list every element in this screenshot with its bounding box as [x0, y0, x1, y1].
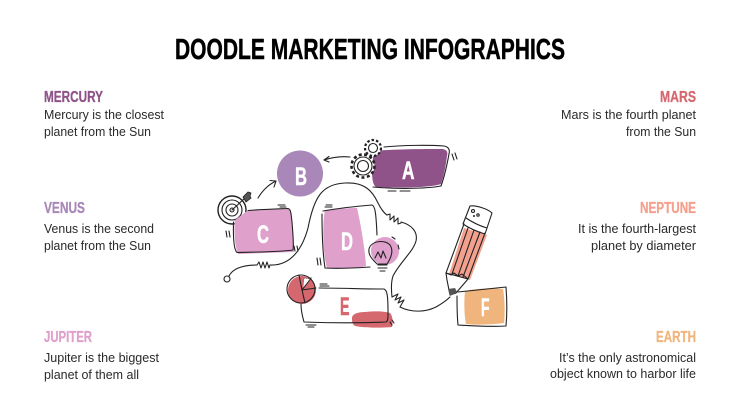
text block: Neptune: NEPTUNE — [640, 200, 696, 217]
text block: Earth: object known to harbor life — [550, 366, 696, 381]
text block: Jupiter: Jupiter is the biggest — [44, 350, 159, 365]
text block: Venus: VENUS — [44, 200, 85, 217]
text block: Mars: Mars is the fourth planet — [561, 107, 696, 122]
text block: Venus: Venus is the second — [44, 221, 154, 236]
icon: light bulb — [369, 237, 399, 271]
connector wire — [229, 183, 450, 311]
icon: gears — [352, 140, 381, 178]
text block: Mercury: Mercury is the closest — [44, 107, 164, 122]
text block: Jupiter: planet of them all — [44, 367, 139, 382]
icon: pie chart — [287, 275, 316, 304]
icon: target with dart — [218, 192, 251, 224]
text block: Neptune: planet by diameter — [591, 238, 697, 253]
text block: Jupiter — [44, 329, 159, 382]
panel F — [457, 287, 507, 326]
text block: Jupiter: JUPITER — [44, 329, 92, 346]
resistor zigzag 2 — [387, 214, 401, 224]
text block: Earth — [550, 329, 696, 381]
circle B — [277, 150, 323, 196]
text block: Venus — [44, 200, 154, 253]
panel C: C — [257, 221, 269, 249]
text block: Mercury — [44, 89, 164, 139]
text block: Neptune — [578, 200, 697, 253]
panel D — [317, 205, 377, 269]
text block: Mars — [561, 89, 696, 139]
text block: Mars: MARS — [660, 89, 696, 106]
panel F: F — [481, 294, 490, 322]
title: DOODLE MARKETING INFOGRAPHICS — [175, 34, 565, 66]
panel E: E — [340, 293, 350, 321]
wire end ring — [224, 276, 230, 282]
arrow: gears to B — [324, 156, 350, 162]
arrow: C to B — [258, 180, 276, 198]
text block: Earth: It’s the only astronomical — [559, 350, 696, 365]
text block: Mars: from the Sun — [626, 124, 696, 139]
panel A: A — [402, 157, 414, 185]
resistor zigzag 3 — [392, 294, 404, 307]
text block: Neptune: It is the fourth-largest — [578, 221, 696, 236]
resistor zigzag 1 — [257, 262, 270, 268]
text block: Venus: planet from the Sun — [44, 238, 151, 253]
text block: Mercury: MERCURY — [44, 89, 103, 106]
panel A — [372, 145, 457, 191]
panel E — [301, 284, 394, 328]
circle B: B — [295, 163, 307, 191]
text block: Mercury: planet from the Sun — [44, 124, 151, 139]
icon: pencil — [446, 206, 492, 296]
text block: Earth: EARTH — [656, 329, 696, 346]
panel D: D — [341, 228, 353, 256]
panel C — [226, 205, 298, 254]
